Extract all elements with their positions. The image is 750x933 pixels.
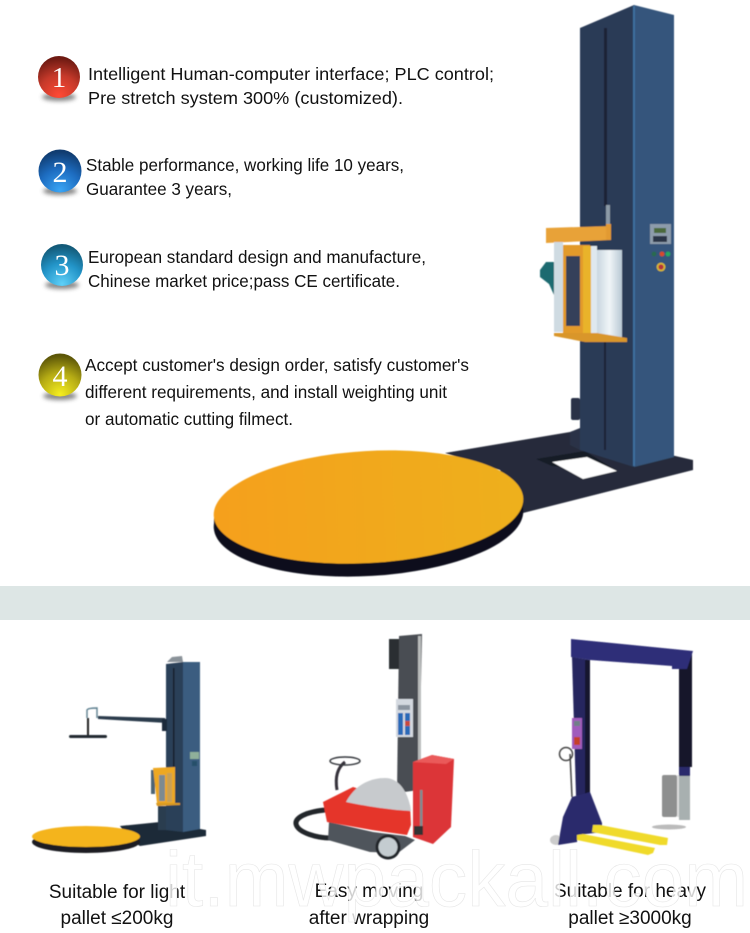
text: feature 4: Accept customer's design order, satisfy customer's [85, 355, 469, 375]
machine base arm [445, 432, 693, 513]
model 2 wheel [376, 834, 400, 860]
machine column [570, 5, 674, 467]
text: feature 2: Guarantee 3 years, [86, 179, 232, 199]
wrapping carriage [540, 205, 627, 342]
model 1 carriage [151, 767, 180, 806]
caption: model 3: Suitable for heavy [554, 881, 707, 902]
badge 1: 1 [52, 62, 66, 94]
model 1 press arm [69, 708, 167, 738]
model 2 handle [330, 757, 360, 790]
caption: model 3 [554, 881, 707, 929]
text: feature 4: different requirements, and install weighting unit [85, 382, 447, 402]
model 3 film roll [652, 767, 690, 830]
text: feature 2 [86, 155, 404, 199]
model 3 tiller [560, 748, 572, 797]
model 1: light pallet wrapper [32, 656, 206, 853]
badge 1 [38, 56, 80, 101]
badge 3 [41, 244, 83, 289]
model 2: mobile robot wrapper [296, 634, 454, 860]
caption: model 3: pallet ≥3000kg [568, 908, 692, 929]
divider band [0, 586, 750, 620]
model 1 column [166, 656, 200, 832]
badge 4: 4 [52, 360, 68, 393]
control panel [650, 224, 671, 271]
badge 2: 2 [52, 156, 68, 189]
model 2 lower chassis [328, 822, 415, 853]
model 3 forks [577, 825, 668, 855]
text: feature 1: Pre stretch system 300% (customized). [88, 88, 403, 108]
text: feature 4: or automatic cutting filmect. [85, 409, 293, 429]
model 1 base [120, 822, 206, 846]
text: feature 1 [88, 64, 494, 108]
badge 4 [38, 354, 82, 400]
caption: model 1 [49, 882, 186, 929]
text: feature 3 [88, 247, 426, 291]
main machine: pallet wrapper [210, 5, 693, 585]
caption: model 1: pallet ≤200kg [61, 908, 173, 929]
model 2 keypad [396, 699, 413, 737]
turntable [210, 442, 527, 585]
badge 2 [38, 150, 82, 195]
model 3 panel [572, 718, 582, 749]
text: feature 3: European standard design and manufacture, [88, 247, 426, 267]
model 2 red film box [413, 755, 454, 844]
text: feature 2: Stable performance, working life 10 years, [86, 155, 404, 175]
caption: model 2 [309, 881, 429, 929]
text: feature 4 [85, 355, 469, 429]
model 2 red body [323, 787, 411, 835]
text: feature 3: Chinese market price;pass CE certificate. [88, 271, 400, 291]
model 1 turntable [32, 826, 140, 853]
caption: model 2: Easy moving [315, 881, 423, 902]
watermark: it.mwpackall.com [165, 835, 748, 923]
caption: model 2: after wrapping [309, 908, 429, 929]
model 2 grey dome [346, 778, 411, 811]
badge 3: 3 [54, 249, 70, 282]
model 2 belt [296, 810, 330, 838]
text: feature 1: Intelligent Human-computer interface; PLC control; [88, 64, 494, 84]
model 3 portal frame [571, 639, 693, 796]
model 3 base [550, 792, 602, 845]
model 3: heavy pallet wrapper [550, 639, 693, 855]
caption: model 1: Suitable for light [49, 882, 186, 903]
model 2 mast [389, 634, 422, 793]
